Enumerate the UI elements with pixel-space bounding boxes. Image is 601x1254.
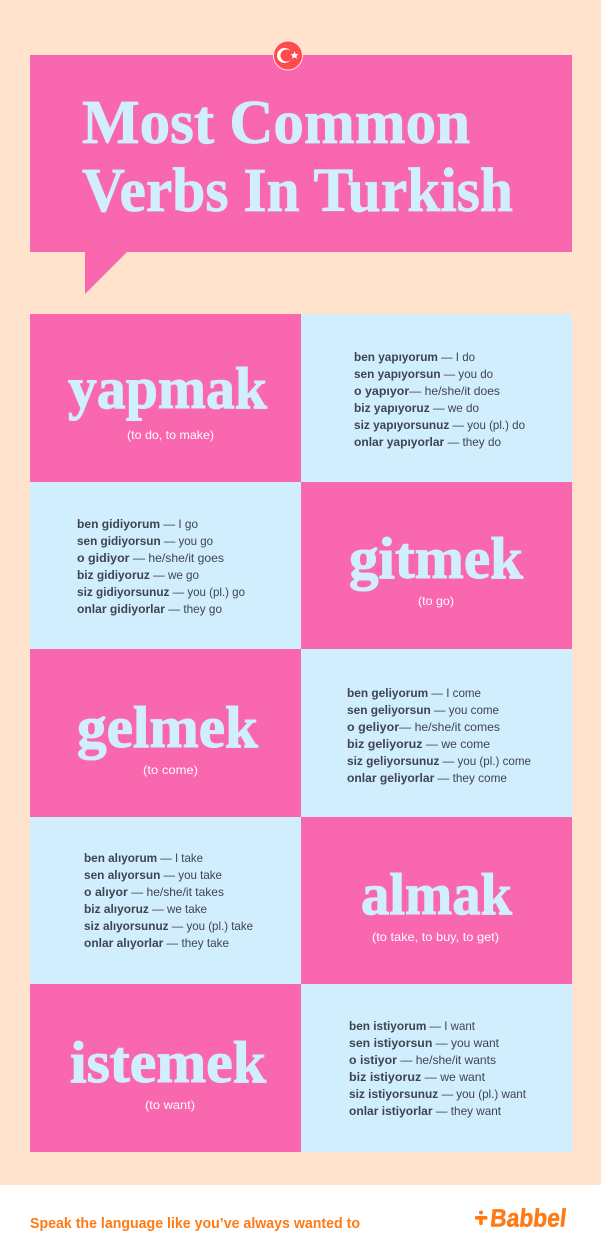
panel: yapmak conjugation: ben yapıyorum — I do: [354, 350, 475, 364]
panel: gelmek conjugation: o geliyor— he/she/it comes: [347, 720, 500, 734]
panel: almak: almak: [361, 861, 512, 927]
panel: almak conjugation: siz alıyorsunuz — you (pl.) take: [84, 919, 253, 933]
panel: istemek conjugation: sen istiyorsun — you want: [349, 1036, 500, 1050]
panel: almak: [301, 817, 572, 984]
panel: istemek conjugation: biz istiyoruz — we want: [349, 1070, 486, 1084]
panel: gelmek conjugation: siz geliyorsunuz — you (pl.) come: [347, 754, 531, 768]
panel: istemek conjugation: onlar istiyorlar — they want: [349, 1104, 502, 1118]
panel: gitmek conjugation: biz gidiyoruz — we go: [77, 568, 199, 582]
panel: gitmek conjugation: [30, 482, 301, 649]
panel: almak: (to take, to buy, to get): [372, 930, 499, 944]
panel: gitmek conjugation: onlar gidiyorlar — they go: [77, 602, 222, 616]
title: [82, 89, 513, 225]
title: Verbs In Turkish: [82, 157, 513, 225]
panel: gelmek conjugation: [301, 649, 572, 817]
panel: istemek: istemek: [70, 1029, 266, 1095]
panel: yapmak conjugation: [301, 314, 572, 482]
title speech bubble: [30, 55, 572, 294]
panel: gelmek conjugation: sen geliyorsun — you come: [347, 703, 499, 717]
panel: almak conjugation: onlar alıyorlar — they take: [84, 936, 229, 950]
panel: gelmek: (to come): [143, 763, 198, 777]
panel: yapmak: yapmak: [68, 355, 267, 421]
footer: [0, 1185, 601, 1254]
panel: gitmek conjugation: o gidiyor — he/she/it goes: [77, 551, 224, 565]
panel: yapmak conjugation: biz yapıyoruz — we do: [354, 401, 479, 415]
panel: istemek: (to want): [145, 1098, 195, 1112]
title: Most Common: [82, 89, 470, 157]
panel: gitmek: [301, 482, 572, 649]
panel: gitmek conjugation: siz gidiyorsunuz — you (pl.) go: [77, 585, 245, 599]
panel: gelmek conjugation: ben geliyorum — I come: [347, 686, 481, 700]
panel: almak conjugation: o alıyor — he/she/it takes: [84, 885, 224, 899]
panel: istemek: [30, 984, 301, 1152]
panel: yapmak: [30, 314, 301, 482]
panel: yapmak conjugation: sen yapıyorsun — you do: [354, 367, 493, 381]
tagline: Speak the language like you’ve always wanted to: [30, 1215, 360, 1232]
panel: gitmek conjugation: sen gidiyorsun — you go: [77, 534, 213, 548]
panel: gelmek conjugation: biz geliyoruz — we come: [347, 737, 490, 751]
panel: istemek conjugation: [301, 984, 572, 1152]
panel: almak conjugation: sen alıyorsun — you take: [84, 868, 222, 882]
panel: istemek conjugation: o istiyor — he/she/it wants: [349, 1053, 496, 1067]
logo: Babbel: Babbel: [489, 1205, 568, 1232]
panel: gelmek conjugation: onlar geliyorlar — they come: [347, 771, 507, 785]
panel: istemek conjugation: siz istiyorsunuz — you (pl.) want: [349, 1087, 527, 1101]
panel: yapmak conjugation: onlar yapıyorlar — they do: [354, 435, 501, 449]
icon: Turkish flag: [274, 41, 302, 70]
panel: yapmak: (to do, to make): [127, 428, 214, 442]
panel: gelmek: [30, 649, 301, 817]
panel: istemek conjugation: ben istiyorum — I want: [349, 1019, 476, 1033]
panel: gelmek: gelmek: [77, 694, 258, 760]
panel: gitmek conjugation: ben gidiyorum — I go: [77, 517, 198, 531]
panel: yapmak conjugation: o yapıyor— he/she/it does: [354, 384, 500, 398]
panel: almak conjugation: ben alıyorum — I take: [84, 851, 203, 865]
panel: gitmek: gitmek: [349, 525, 523, 591]
panel: almak conjugation: biz alıyoruz — we take: [84, 902, 207, 916]
panel: almak conjugation: [30, 817, 301, 984]
panel: gitmek: (to go): [418, 594, 454, 608]
panel: yapmak conjugation: siz yapıyorsunuz — you (pl.) do: [354, 418, 525, 432]
